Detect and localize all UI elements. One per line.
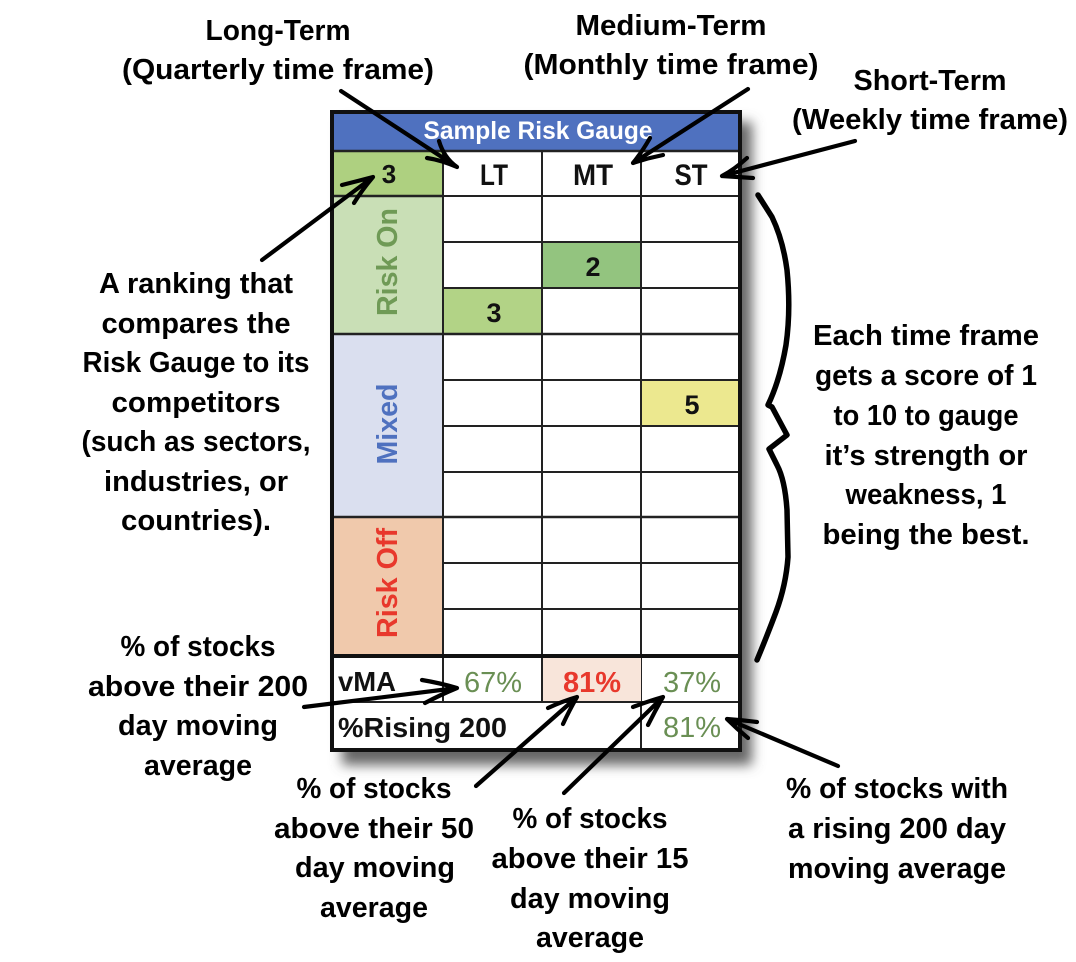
score: ST 5: 5 bbox=[684, 390, 700, 420]
label: ranking explanation: industries, or bbox=[104, 466, 288, 498]
label: long-term: Long-Term bbox=[206, 15, 350, 47]
vMA row: 67% bbox=[464, 667, 522, 699]
label: score explanation: to 10 to gauge bbox=[834, 400, 1018, 432]
%Rising 200 row bbox=[338, 712, 721, 744]
band: Mixed: Mixed bbox=[372, 384, 404, 464]
arrow: short-term to ST bbox=[722, 141, 855, 178]
score: MT 2 bbox=[543, 243, 641, 288]
vMA row bbox=[338, 658, 721, 701]
vMA row: vMA bbox=[338, 666, 396, 697]
label: 15 day: % of stocks bbox=[512, 803, 668, 835]
arrow: 200 day to LT percentage bbox=[304, 680, 457, 707]
label: 15 day bbox=[492, 803, 688, 954]
label: rising 200 day bbox=[786, 773, 1008, 885]
score: ST 5 bbox=[642, 381, 739, 426]
arrow: ranking to score bbox=[262, 177, 373, 260]
column headers: LT bbox=[480, 159, 508, 192]
band: Risk On: Risk On bbox=[372, 208, 404, 316]
band: Risk Off bbox=[333, 517, 443, 655]
vMA row: 37% bbox=[663, 667, 721, 699]
band: Risk On bbox=[333, 196, 443, 334]
band: Risk Off: Risk Off bbox=[372, 528, 404, 638]
label: short-term: (Weekly time frame) bbox=[792, 104, 1068, 136]
label: rising 200 day: a rising 200 day bbox=[788, 813, 1006, 845]
label: 200 day bbox=[88, 631, 308, 782]
label: 200 day: day moving bbox=[118, 710, 278, 742]
label: 50 day: % of stocks bbox=[296, 773, 452, 805]
label: medium-term: Medium-Term bbox=[576, 10, 766, 42]
label: ranking explanation: A ranking that bbox=[99, 268, 293, 300]
table shadow bbox=[342, 122, 752, 765]
label: ranking explanation bbox=[82, 268, 310, 537]
label: score explanation: it’s strength or bbox=[824, 440, 1028, 472]
label: 50 day: average bbox=[320, 892, 428, 924]
overall rank cell: 3 bbox=[382, 159, 396, 189]
overall rank cell bbox=[333, 151, 443, 196]
label: 15 day: above their 15 bbox=[492, 843, 688, 875]
arrow: 15 day to ST percentage bbox=[564, 697, 663, 793]
risk gauge table bbox=[332, 111, 752, 765]
label: medium-term bbox=[524, 10, 818, 81]
column headers bbox=[480, 159, 708, 192]
label: 200 day: % of stocks bbox=[120, 631, 276, 663]
column headers: MT bbox=[573, 159, 613, 192]
label: short-term: Short-Term bbox=[854, 65, 1006, 97]
label: 200 day: above their 200 bbox=[88, 671, 308, 703]
label: 50 day: day moving bbox=[295, 852, 455, 884]
label: 200 day: average bbox=[144, 750, 252, 782]
label: 50 day bbox=[274, 773, 474, 924]
score: LT 3 bbox=[444, 289, 542, 334]
column headers: ST bbox=[674, 159, 708, 192]
%Rising 200 row: %Rising 200 bbox=[338, 712, 507, 743]
label: ranking explanation: Risk Gauge to its bbox=[82, 347, 310, 379]
arrow: 50 day to MT percentage bbox=[476, 697, 577, 786]
label: score explanation: Each time frame bbox=[813, 320, 1039, 352]
arrow: rising 200 to percentage bbox=[727, 719, 838, 766]
label: ranking explanation: (such as sectors, bbox=[82, 426, 310, 458]
label: long-term: (Quarterly time frame) bbox=[122, 54, 434, 86]
arrow: medium-term to MT bbox=[633, 89, 748, 163]
label: 15 day: day moving bbox=[510, 883, 670, 915]
arrow: long-term to LT bbox=[341, 91, 457, 167]
label: short-term bbox=[792, 65, 1068, 136]
label: score explanation: being the best. bbox=[822, 519, 1030, 551]
table title bar bbox=[333, 112, 739, 151]
label: rising 200 day: % of stocks with bbox=[786, 773, 1008, 805]
label: 15 day: average bbox=[536, 922, 644, 954]
score: LT 3: 3 bbox=[486, 298, 502, 328]
label: ranking explanation: competitors bbox=[112, 387, 280, 419]
brace bbox=[757, 195, 789, 660]
band: Mixed bbox=[333, 334, 443, 517]
label: rising 200 day: moving average bbox=[788, 853, 1006, 885]
label: ranking explanation: countries). bbox=[121, 505, 271, 537]
label: 50 day: above their 50 bbox=[274, 813, 474, 845]
table title bar: Sample Risk Gauge bbox=[424, 117, 653, 145]
vMA row: 81% bbox=[563, 667, 621, 699]
label: long-term bbox=[122, 15, 434, 86]
label: ranking explanation: compares the bbox=[102, 308, 290, 340]
label: medium-term: (Monthly time frame) bbox=[524, 49, 818, 81]
label: score explanation: gets a score of 1 bbox=[815, 360, 1037, 392]
label: score explanation bbox=[813, 320, 1039, 551]
score: MT 2: 2 bbox=[585, 252, 601, 282]
label: score explanation: weakness, 1 bbox=[845, 479, 1006, 511]
%Rising 200 row: 81% bbox=[663, 712, 721, 744]
